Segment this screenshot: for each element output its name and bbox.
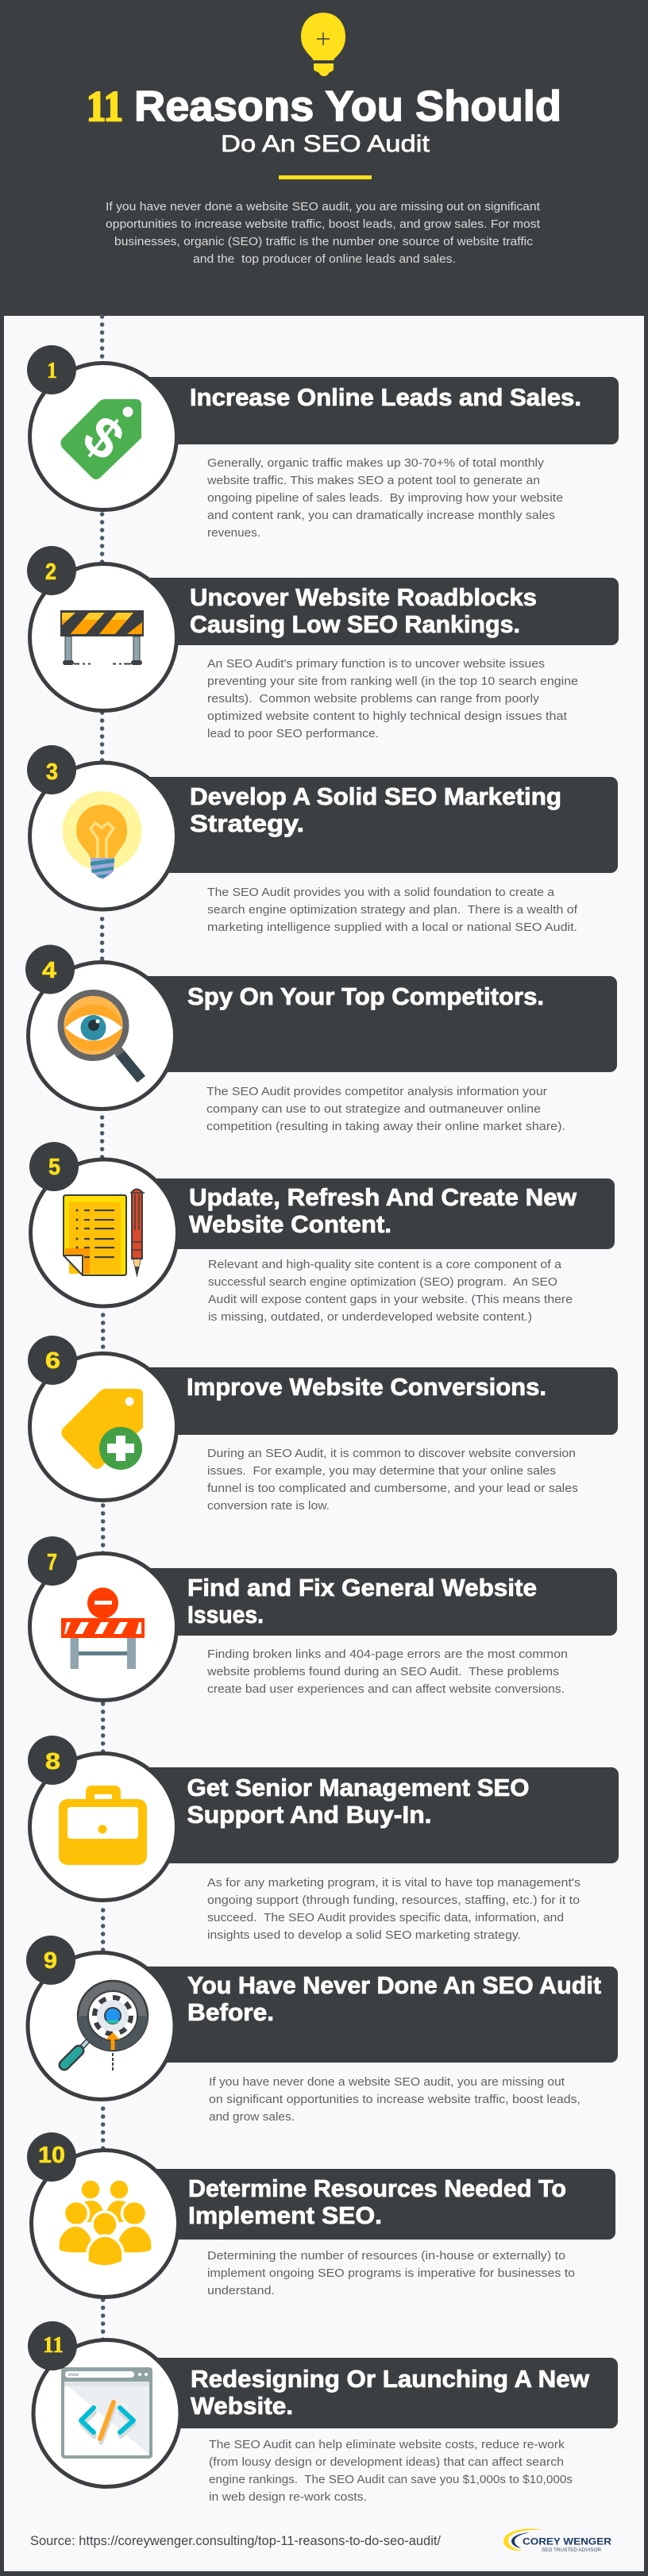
body text: competition (resulting in taking away their online market share). xyxy=(206,1121,565,1133)
heading: Spy On Your Top Competitors. xyxy=(187,982,544,1010)
heading: Support And Buy-In. xyxy=(187,1801,432,1828)
body text: website traffic. This makes SEO a potent tool to generate an xyxy=(206,475,540,487)
heading: Before. xyxy=(187,1998,274,2026)
number badge: 6 xyxy=(45,1348,60,1374)
body text: The SEO Audit provides you with a solid foundation to create a xyxy=(207,886,555,899)
heading bar xyxy=(103,777,618,873)
body text: Relevant and high-quality site content is a core component of a xyxy=(208,1259,562,1271)
icon: briefcase xyxy=(59,1786,147,1865)
intro text: opportunities to increase website traffic, boost leads, and grow sales. For most xyxy=(106,218,540,231)
body text xyxy=(206,1086,565,1133)
heading: Website. xyxy=(191,2392,293,2420)
intro text: businesses, organic (SEO) traffic is the number one source of website traffic xyxy=(114,236,533,248)
body text: revenues. xyxy=(207,527,260,540)
yellow rule xyxy=(279,175,372,179)
heading xyxy=(188,2174,566,2229)
heading: Get Senior Management SEO xyxy=(187,1774,529,1801)
icon circle xyxy=(29,962,175,1109)
logo: Corey Wenger xyxy=(503,2528,611,2553)
dotted connector xyxy=(102,317,103,2341)
body text: on significant opportunities to increase website traffic, boost leads, xyxy=(209,2093,580,2106)
number badge xyxy=(27,345,76,394)
heading xyxy=(190,782,561,837)
icon: green price tag xyxy=(60,399,141,479)
heading: Website Content. xyxy=(189,1210,392,1238)
icon circle xyxy=(30,1554,176,1700)
body text xyxy=(207,1877,580,1942)
icon: group of people xyxy=(58,2179,152,2266)
number badge: 7 xyxy=(47,1550,57,1575)
icon: note and pencil xyxy=(64,1189,145,1278)
item 6: improve website conversions xyxy=(28,1336,618,1513)
heading: Issues. xyxy=(187,1601,264,1628)
heading xyxy=(189,1183,577,1238)
icon: green price tag: $ xyxy=(71,403,135,473)
body text: conversion rate is low. xyxy=(207,1500,330,1513)
heading: Develop A Solid SEO Marketing xyxy=(190,782,561,810)
heading bar xyxy=(103,1367,618,1435)
number badge xyxy=(27,546,76,595)
body text: successful search engine optimization (SEO) program. An SEO xyxy=(208,1276,557,1289)
title: 11 xyxy=(87,83,123,130)
number badge xyxy=(29,1142,79,1191)
body text: implement ongoing SEO programs is imperative for businesses to xyxy=(207,2267,575,2280)
item 1: increase online leads and sales xyxy=(27,345,619,540)
intro text: and the top producer of online leads and sales. xyxy=(193,253,456,266)
body text: and grow sales. xyxy=(209,2111,295,2124)
heading xyxy=(187,1774,529,1828)
item 11: redesigning or launching a new website xyxy=(28,2321,618,2504)
icon circle xyxy=(30,363,176,509)
subtitle: Do An SEO Audit xyxy=(221,131,430,157)
heading bar xyxy=(106,2358,618,2428)
heading bar xyxy=(104,1178,615,1249)
icon: code window xyxy=(61,2367,152,2459)
heading: Causing Low SEO Rankings. xyxy=(190,610,520,638)
number badge: 9 xyxy=(44,1948,57,1974)
heading bar xyxy=(103,1767,619,1863)
number badge: 2 xyxy=(45,559,56,585)
body text: marketing intelligence supplied with a local or national SEO Audit. xyxy=(207,921,577,934)
body text: preventing your site from ranking well (in the top 10 search engine xyxy=(207,675,578,688)
icon: magnifier with eye xyxy=(60,993,141,1079)
icon circle xyxy=(32,2151,178,2297)
body text: issues. For example, you may determine that your online sales xyxy=(207,1465,556,1478)
icon circle xyxy=(33,2340,180,2487)
number badge xyxy=(28,1736,77,1785)
number badge: 3 xyxy=(46,759,58,785)
body text xyxy=(208,1259,573,1324)
item 7: find and fix general website issues xyxy=(28,1536,617,1700)
body text: succeed. The SEO Audit provides specific data, information, and xyxy=(207,1912,564,1924)
icon: yellow tag with plus xyxy=(61,1389,143,1470)
logo: Corey Wenger: SEO TRUSTED ADVISOR xyxy=(542,2547,601,2553)
body text: and content rank, you can dramatically increase monthly sales xyxy=(207,509,555,522)
number badge: 11 xyxy=(43,2332,64,2358)
heading bar xyxy=(103,578,619,645)
number badge xyxy=(28,1536,77,1586)
body text: ongoing pipeline of sales leads. By improving how your website xyxy=(207,492,563,505)
number badge: 8 xyxy=(45,1749,60,1774)
heading: Implement SEO. xyxy=(188,2201,382,2229)
icon circle xyxy=(30,1754,176,1900)
number badge xyxy=(27,2132,76,2182)
heading: Update, Refresh And Create New xyxy=(189,1183,577,1211)
body text: The SEO Audit can help eliminate website costs, reduce re-work xyxy=(209,2439,565,2451)
body text: The SEO Audit provides competitor analysis information your xyxy=(206,1086,547,1098)
logo: Corey Wenger: COREY WENGER xyxy=(523,2536,611,2547)
body text: Audit will expose content gaps in your website. (This means there xyxy=(208,1294,573,1306)
body text: website problems found during an SEO Audit. These problems xyxy=(206,1666,559,1678)
heading: Improve Website Conversions. xyxy=(187,1373,546,1401)
heading bar xyxy=(103,1568,617,1636)
body text xyxy=(207,1448,578,1513)
item 8: get senior management SEO support xyxy=(28,1736,619,1942)
icon: light bulb xyxy=(301,13,345,76)
heading xyxy=(191,2365,590,2420)
item 9: you have never done an SEO audit before xyxy=(26,1936,618,2124)
body text: search engine optimization strategy and plan. There is a wealth of xyxy=(207,904,578,917)
body text: results). Common website problems can range from poorly xyxy=(207,693,540,706)
heading bar xyxy=(105,2169,615,2240)
body text xyxy=(207,658,578,740)
number badge xyxy=(27,745,76,794)
number badge: 5 xyxy=(48,1155,60,1180)
body text xyxy=(209,2439,573,2504)
number badge xyxy=(25,944,75,994)
body text: An SEO Audit's primary function is to uncover website issues xyxy=(207,658,545,671)
icon circle xyxy=(30,763,176,909)
body text: Determining the number of resources (in-house or externally) to xyxy=(207,2250,565,2263)
body text: optimized website content to highly technical design issues that xyxy=(207,710,567,723)
icon: magnifier with gear xyxy=(64,1981,148,2070)
heading: Find and Fix General Website xyxy=(187,1574,537,1601)
item 5: update, refresh and create new website content xyxy=(29,1142,615,1324)
heading xyxy=(187,1574,537,1628)
intro text xyxy=(106,201,540,266)
body text: in web design re-work costs. xyxy=(209,2491,367,2504)
body text: funnel is too complicated and cumbersome, and your lead or sales xyxy=(207,1482,578,1495)
source line: Source: https://coreywenger.consulting/top-11-reasons-to-do-seo-audit/ xyxy=(30,2534,441,2548)
icon circle xyxy=(30,563,176,711)
body text: Finding broken links and 404-page errors are the most common xyxy=(207,1648,568,1661)
body text xyxy=(207,886,578,934)
number badge xyxy=(26,1936,75,1985)
heading bar xyxy=(103,377,619,444)
item 10: determine resources needed xyxy=(27,2132,615,2297)
heading: Redesigning Or Launching A New xyxy=(191,2365,590,2393)
item 3: develop a solid SEO marketing strategy xyxy=(27,745,618,934)
number badge xyxy=(28,1336,77,1385)
body text: During an SEO Audit, it is common to discover website conversion xyxy=(207,1448,576,1460)
body text: (from lousy design or development ideas) that can affect search xyxy=(209,2456,564,2469)
heading: You Have Never Done An SEO Audit xyxy=(187,1971,601,1999)
number badge xyxy=(28,2321,77,2370)
icon: code window: www xyxy=(68,2373,79,2378)
body text: company can use to out strategize and outmaneuver online xyxy=(206,1103,541,1116)
title: Reasons You Should xyxy=(134,83,561,130)
body text xyxy=(206,1648,568,1696)
icon: road closed barrier xyxy=(61,1587,145,1669)
item 2: uncover website roadblocks xyxy=(27,546,619,740)
heading: Strategy. xyxy=(190,809,304,837)
heading: Increase Online Leads and Sales. xyxy=(190,383,581,411)
body text: understand. xyxy=(207,2285,275,2297)
body text: engine rankings. The SEO Audit can save you $1,000s to $10,000s xyxy=(209,2474,573,2486)
heading: Determine Resources Needed To xyxy=(188,2174,566,2202)
body text xyxy=(206,457,563,540)
heading xyxy=(190,583,537,638)
body text: lead to poor SEO performance. xyxy=(207,728,379,740)
icon: light bulb xyxy=(62,791,141,879)
number badge: 1 xyxy=(47,358,57,383)
body text: If you have never done a website SEO audit, you are missing out xyxy=(209,2076,565,2089)
body text: Generally, organic traffic makes up 30-70+% of total monthly xyxy=(207,457,545,470)
icon circle xyxy=(30,1159,178,1306)
body text: is missing, outdated, or underdeveloped website content.) xyxy=(208,1311,532,1324)
number badge: 10 xyxy=(38,2143,65,2168)
heading bar xyxy=(102,1967,618,2063)
body text xyxy=(209,2076,580,2124)
heading bar xyxy=(102,976,617,1072)
intro text: If you have never done a website SEO audit, you are missing out on significant xyxy=(106,201,540,213)
icon: striped barrier xyxy=(60,610,144,665)
heading: Uncover Website Roadblocks xyxy=(190,583,537,611)
body text: create bad user experiences and can affect website conversions. xyxy=(207,1683,565,1696)
icon circle xyxy=(28,1952,175,2100)
body text: ongoing support (through funding, resources, staffing, etc.) for it to xyxy=(207,1894,580,1907)
body text xyxy=(207,2250,575,2297)
body text: As for any marketing program, it is vital to have top management's xyxy=(207,1877,580,1890)
heading xyxy=(187,1971,601,2026)
icon circle xyxy=(30,1354,176,1500)
header xyxy=(87,13,561,266)
body text: insights used to develop a solid SEO marketing strategy. xyxy=(207,1929,521,1942)
item 4: spy on your top competitors xyxy=(25,944,617,1133)
number badge: 4 xyxy=(42,958,56,983)
